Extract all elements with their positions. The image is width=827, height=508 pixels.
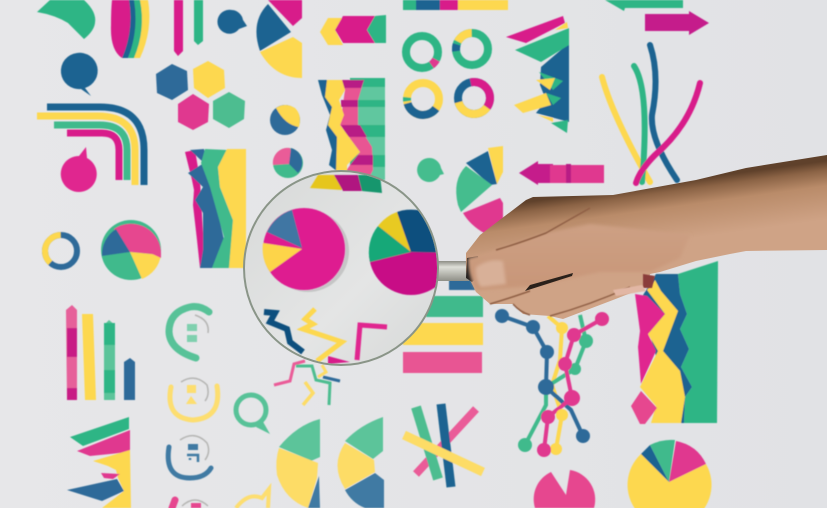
small circle charts <box>270 105 303 178</box>
progress ring blue <box>168 436 211 478</box>
hand <box>466 155 827 319</box>
pac-man pie <box>534 470 595 508</box>
speech bubble magenta <box>61 147 97 192</box>
zigzags below lens <box>274 361 340 405</box>
half pie one <box>276 419 320 508</box>
magnified band <box>310 175 382 193</box>
rings <box>406 33 490 115</box>
magnified triangle <box>328 356 350 364</box>
icon: blue blob <box>217 10 247 34</box>
pie bottom right <box>628 440 712 508</box>
paper layered graph right <box>631 261 718 424</box>
horizontal bars <box>403 280 483 373</box>
progress ring yellow <box>170 378 218 420</box>
icon: green fan <box>37 0 95 39</box>
magnified zigzags <box>264 309 387 361</box>
icon: arrow bars <box>174 0 203 56</box>
speech bubble blue <box>61 53 98 96</box>
left arrow <box>519 161 604 185</box>
arm and back of hand <box>466 155 827 319</box>
top bar strip <box>403 0 508 10</box>
arrows top right <box>605 0 709 35</box>
magnified pie one <box>263 208 349 292</box>
bar chart paper <box>66 305 135 400</box>
paper layered graph left <box>185 149 246 268</box>
crossed bars <box>404 404 483 487</box>
pie left <box>101 220 161 280</box>
small bottom shapes <box>172 489 269 508</box>
pie right of lens <box>456 146 503 233</box>
triangle stack chart <box>506 16 569 133</box>
dark grip under thumb <box>525 273 573 291</box>
progress ring green <box>169 307 209 358</box>
handle grip <box>466 256 480 282</box>
icon: green magnifier <box>236 395 270 434</box>
chevron arrow <box>320 15 386 45</box>
half pie two <box>338 417 384 508</box>
network line chart <box>495 309 609 457</box>
layered leaf shape <box>111 0 149 58</box>
pie: top centre <box>256 0 302 78</box>
curved lines <box>602 45 700 183</box>
thumb <box>468 224 690 290</box>
handle ferrule <box>437 261 469 281</box>
green blob <box>417 158 444 182</box>
lens <box>244 171 438 365</box>
striped wavy chart <box>318 78 385 180</box>
rainbow arcs <box>37 107 144 185</box>
magnified pie two <box>368 208 437 296</box>
magnifying glass <box>244 171 469 365</box>
hexagons <box>156 61 245 130</box>
thumb nail <box>476 260 506 287</box>
triangle stack lower left <box>67 417 131 508</box>
finger nail <box>613 285 646 296</box>
donut left <box>45 235 77 267</box>
finger details <box>490 208 630 316</box>
lens contents <box>263 175 453 364</box>
